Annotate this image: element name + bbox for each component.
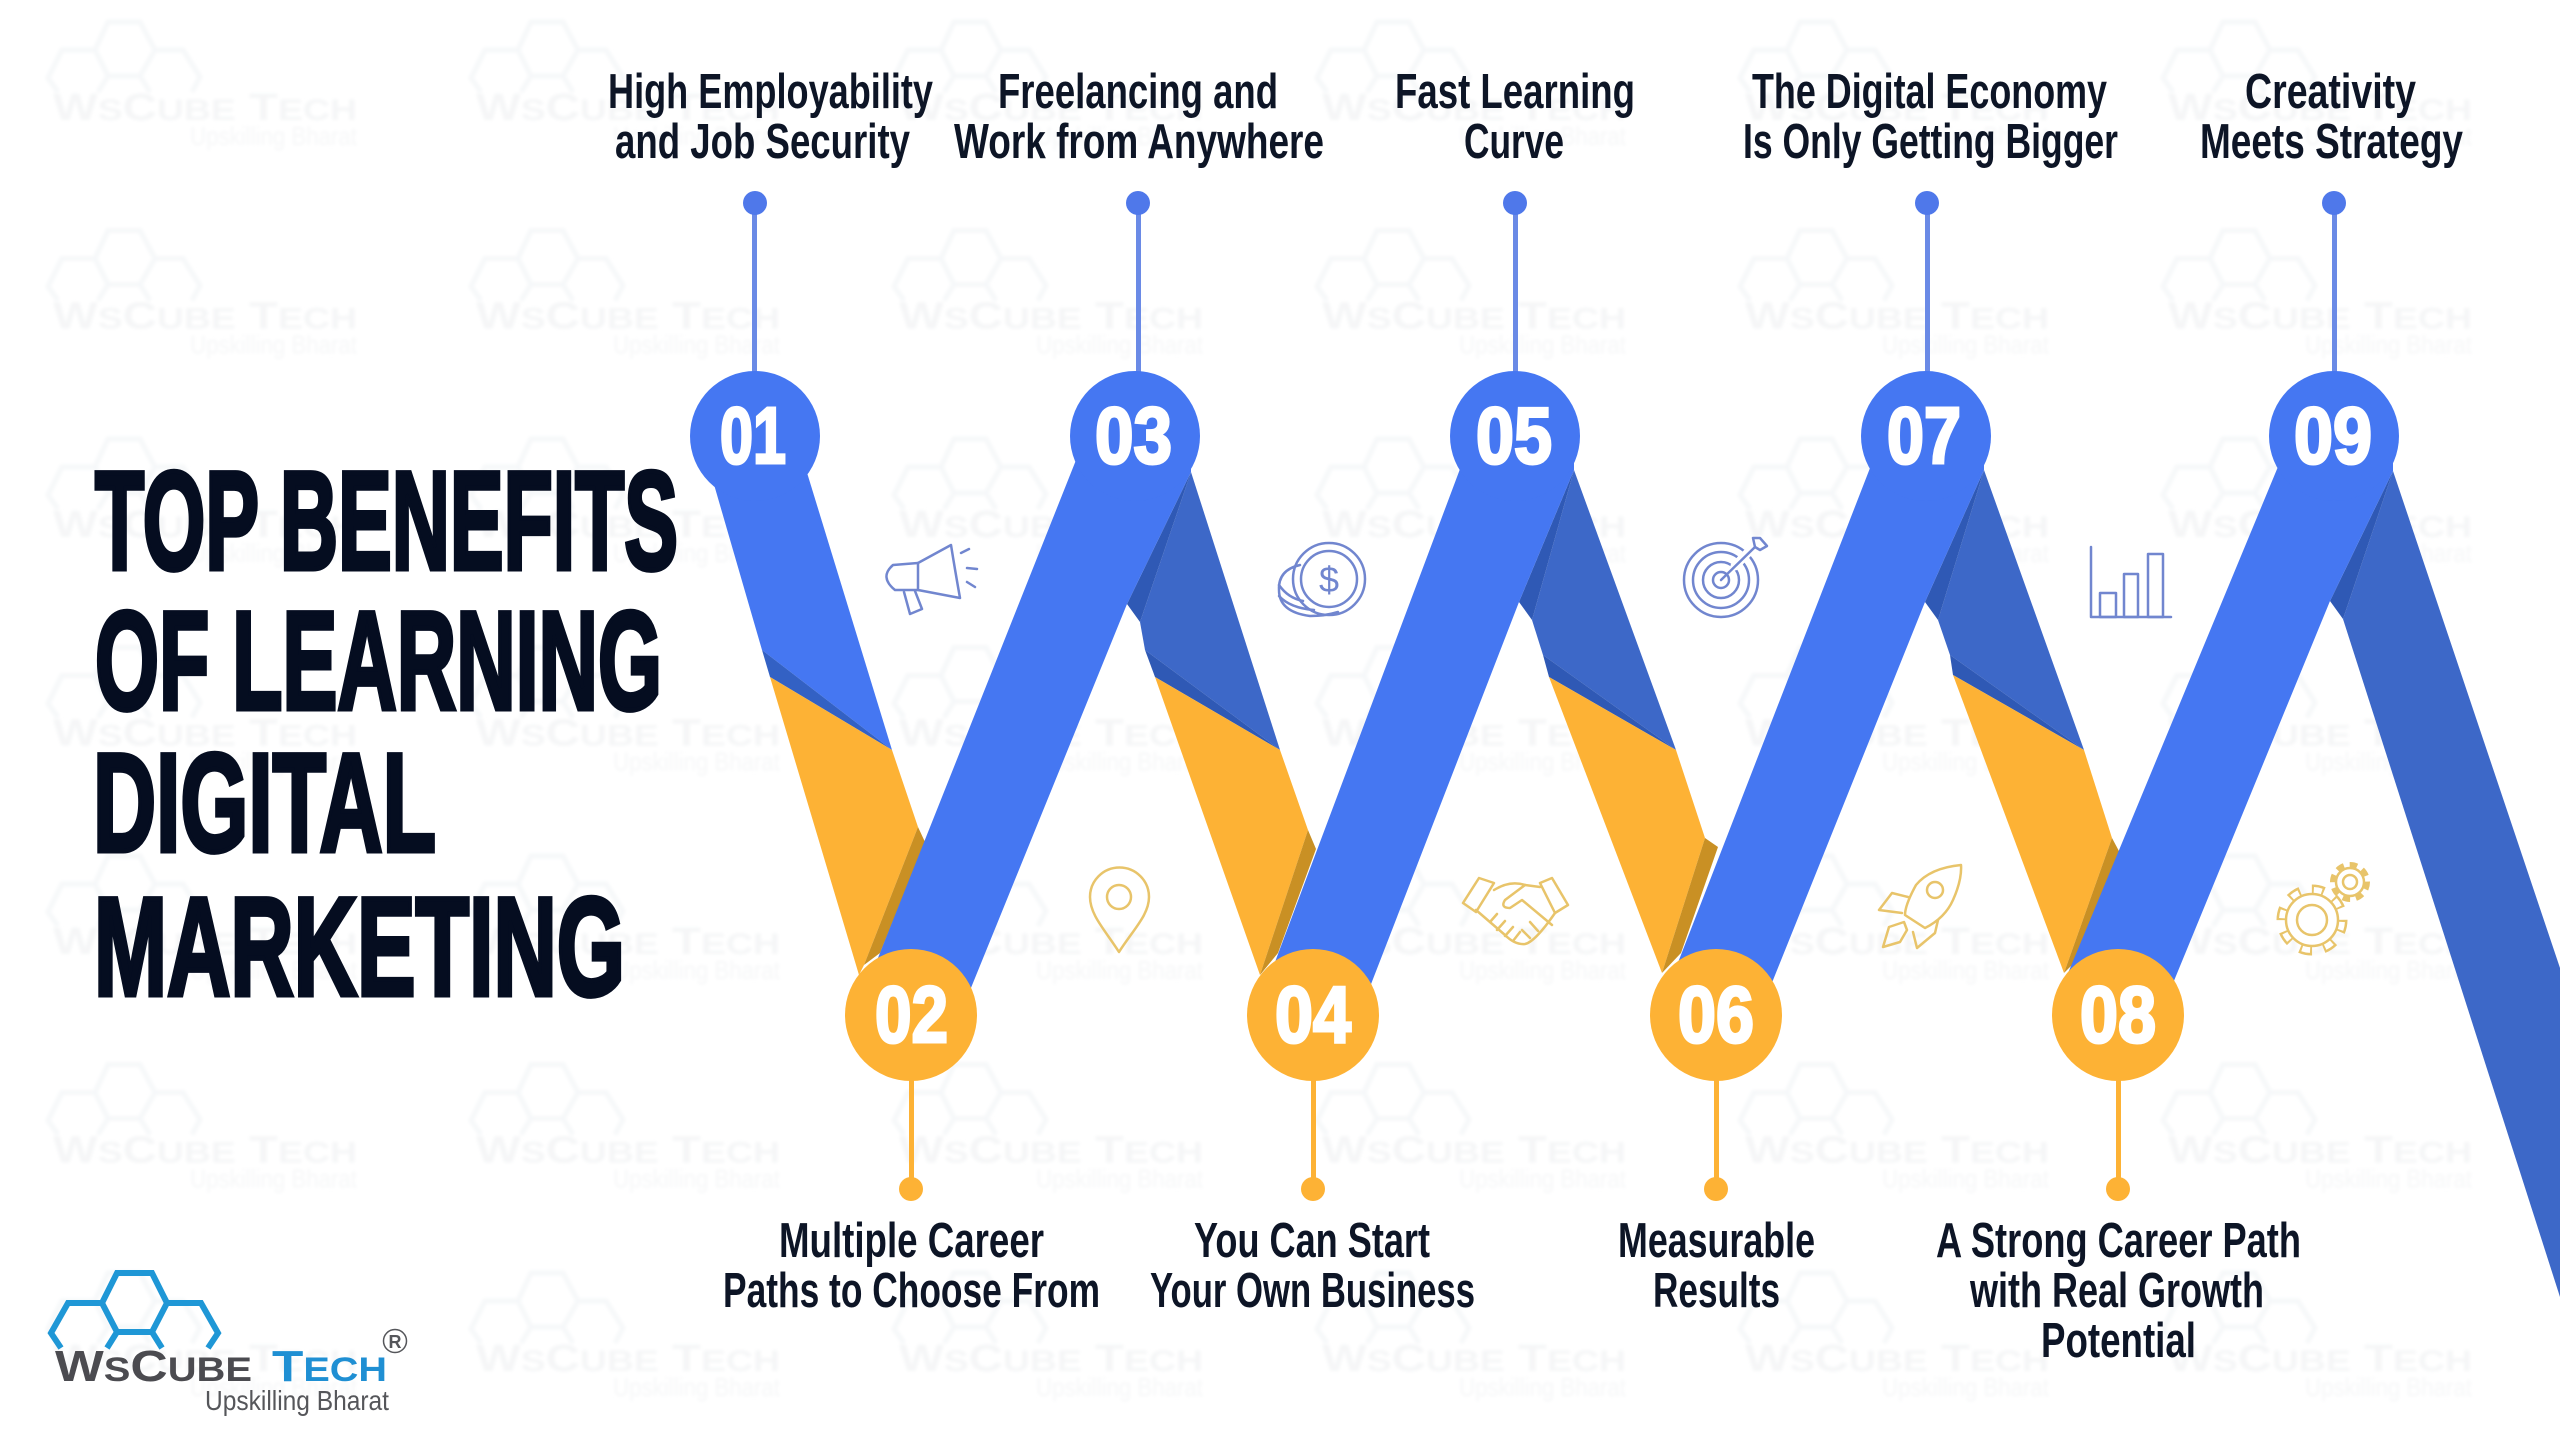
- label 08: [1936, 1214, 2301, 1368]
- label 09: Meets Strategy: [2200, 115, 2463, 169]
- icon: rocket: [1879, 865, 1961, 948]
- label 02: [723, 1214, 1100, 1318]
- label 03: Work from Anywhere: [954, 115, 1324, 169]
- label 05: Curve: [1464, 115, 1564, 169]
- step 04 badge: 04: [1275, 970, 1351, 1059]
- title: [93, 442, 678, 1025]
- descending ribbon 05 to 06: [1519, 470, 1718, 973]
- descending ribbon after 09: [2330, 471, 2560, 1297]
- label 07: [1743, 65, 2118, 169]
- label 01: High Employability: [608, 65, 933, 119]
- icon: location pin: [1090, 868, 1149, 952]
- step 01 badge: 01: [720, 391, 786, 480]
- ascending ribbon 02 to 03: [870, 445, 1191, 1010]
- title: MARKETING: [94, 868, 625, 1025]
- registered mark: [384, 1330, 406, 1352]
- step 05 badge: [1450, 371, 1580, 501]
- step 07 badge: [1861, 371, 1991, 501]
- step 08 badge: 08: [2080, 970, 2156, 1059]
- step 09 badge: [2269, 371, 2399, 501]
- logo: WsCube Tech: [51, 1273, 406, 1416]
- descending ribbon 01 to 02: [704, 440, 925, 975]
- label 09: [2200, 65, 2463, 169]
- title: DIGITAL: [93, 724, 436, 881]
- label 02: Paths to Choose From: [723, 1264, 1100, 1318]
- step 01 badge: [690, 371, 820, 501]
- label 08: with Real Growth: [1969, 1264, 2264, 1318]
- descending ribbon 07 to 08: [1925, 470, 2120, 973]
- label 01: [608, 65, 933, 169]
- step 03 badge: [1070, 371, 1200, 501]
- title: OF LEARNING: [95, 582, 662, 739]
- label 08: Potential: [2041, 1314, 2196, 1368]
- step 02 badge: [845, 949, 977, 1081]
- ascending ribbon 06 to 07: [1672, 450, 1984, 1010]
- title: TOP BENEFITS: [95, 442, 678, 599]
- registered mark: R: [388, 1332, 402, 1352]
- logo wordmark: TECH: [272, 1342, 387, 1391]
- step 05 badge: 05: [1476, 391, 1552, 480]
- label 04: [1150, 1214, 1475, 1318]
- logo wordmark: WSCUBE: [55, 1342, 252, 1391]
- step 07 badge: 07: [1887, 391, 1961, 480]
- label 06: [1618, 1214, 1815, 1318]
- label 04: Your Own Business: [1150, 1264, 1475, 1318]
- label 02: Multiple Career: [779, 1214, 1044, 1268]
- ascending ribbon 08 to 09: [2066, 445, 2393, 1010]
- label 06: Results: [1653, 1264, 1780, 1318]
- icon: gears: [2282, 866, 2366, 950]
- label 03: Freelancing and: [998, 65, 1278, 119]
- icon: target with arrow: [1684, 538, 1767, 617]
- connector stems and dots: top: [743, 191, 2346, 378]
- icon: coin stack: $: [1319, 559, 1339, 600]
- icon: handshake: [1463, 878, 1568, 944]
- label 05: [1395, 65, 1635, 169]
- label 06: Measurable: [1618, 1214, 1815, 1268]
- descending ribbon 03 to 04: [1127, 472, 1316, 975]
- label 03: [954, 65, 1324, 169]
- label 05: Fast Learning: [1395, 65, 1635, 119]
- label 07: Is Only Getting Bigger: [1743, 115, 2118, 169]
- label 08: A Strong Career Path: [1936, 1214, 2301, 1268]
- label 01: and Job Security: [615, 115, 910, 169]
- logo wordmark: [55, 1342, 387, 1391]
- label 04: You Can Start: [1194, 1214, 1430, 1268]
- step 06 badge: 06: [1678, 970, 1754, 1059]
- logo tagline: Upskilling Bharat: [205, 1385, 389, 1416]
- label 07: The Digital Economy: [1752, 65, 2107, 119]
- step 02 badge: 02: [875, 970, 948, 1059]
- step 04 badge: [1247, 949, 1379, 1081]
- logo hexagons: [51, 1273, 218, 1348]
- step 08 badge: [2052, 949, 2184, 1081]
- connector stems and dots: bottom: [899, 1075, 2130, 1201]
- ascending ribbon 04 to 05: [1269, 445, 1574, 1010]
- step 03 badge: 03: [1095, 391, 1172, 480]
- icon: megaphone: [886, 545, 977, 614]
- icon: coin stack: [1279, 543, 1365, 616]
- step 09 badge: 09: [2294, 391, 2372, 480]
- step 06 badge: [1650, 949, 1782, 1081]
- zigzag ribbon chart: [704, 440, 2560, 1297]
- label 09: Creativity: [2245, 65, 2416, 119]
- icon: bar chart: [2091, 547, 2171, 617]
